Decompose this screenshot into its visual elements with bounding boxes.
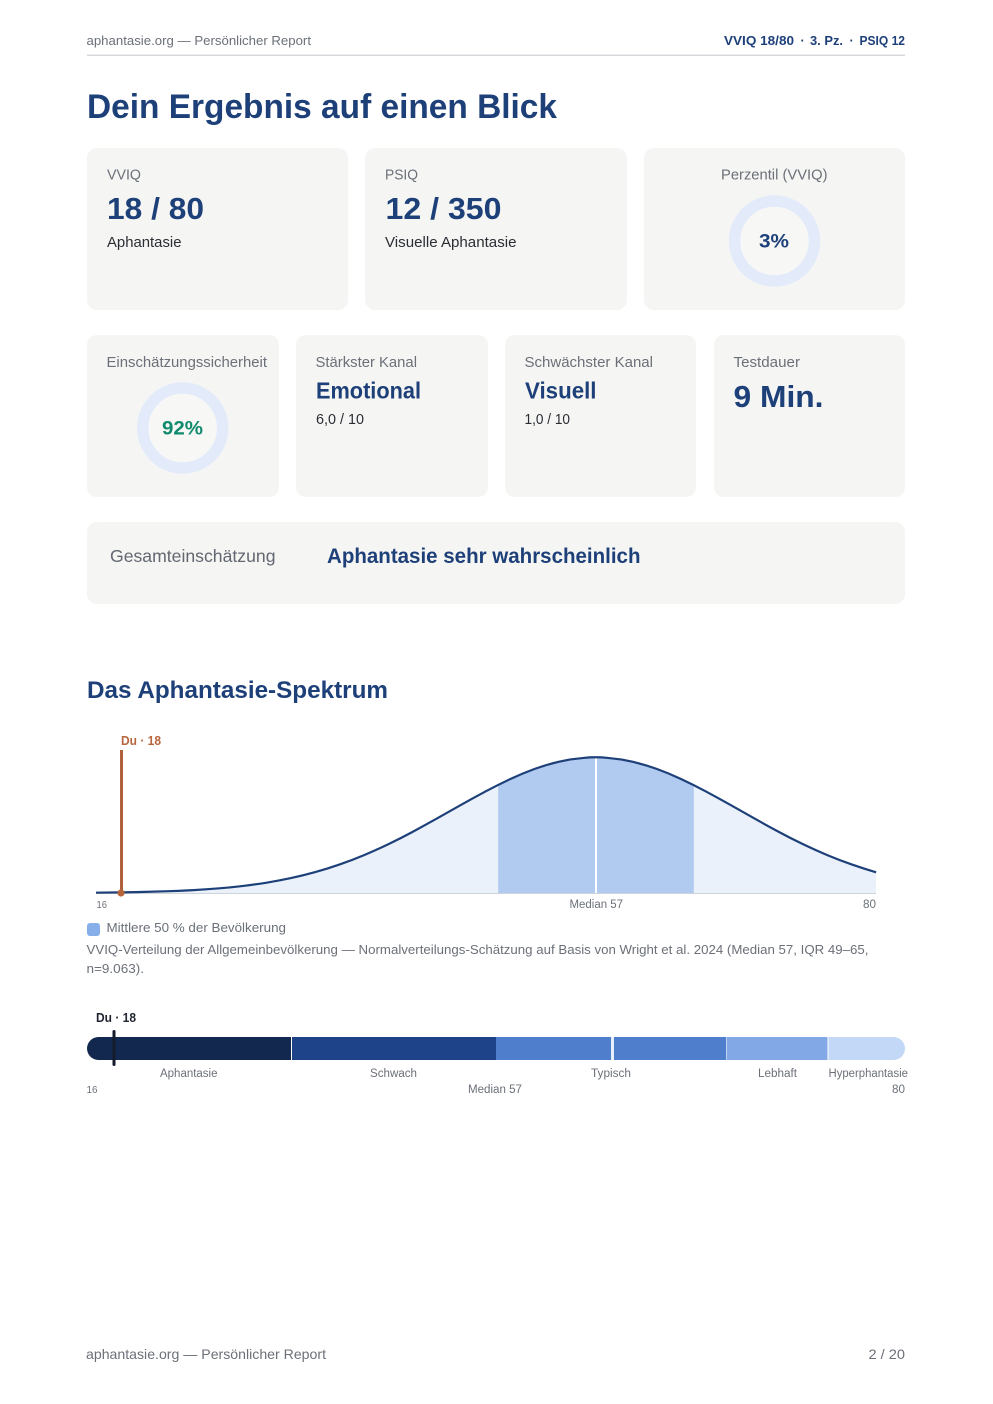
curve line [96,757,876,893]
page header: VVIQ 18/80 [724,34,794,48]
card: VVIQ [87,148,348,310]
median tick [611,1037,614,1060]
card: Stärkster Kanal: Emotional [316,378,421,404]
heading: Spektrum: Das Aphantasie-Spektrum [87,677,388,704]
ring: Perzentil 3%: 3% [759,230,789,252]
axis labels: 16 [96,899,107,911]
chart: distribution curve [96,734,876,911]
card: Stärkster Kanal [296,335,488,497]
ring: Sicherheit 92% [143,388,223,468]
chart note: VVIQ-Verteilung der Allgemeinbevölkerung — Normalverteilungs-Schätzung auf Basis von Wright et al. 2024 (Median 57, IQR 49–65, [86,942,868,957]
card: VVIQ: 18 / 80 [107,191,204,226]
page header: · [800,34,805,48]
marker: Du 18 [96,1011,136,1066]
card: VVIQ: Aphantasie [107,235,182,251]
marker: Du 18: Du · 18 [121,734,161,748]
page header: PSIQ 12 [860,34,905,48]
page footer [86,1346,905,1362]
card: Schwächster Kanal: Schwächster Kanal [524,355,653,371]
card: Stärkster Kanal: Stärkster Kanal [316,355,417,371]
segment: Schwach [292,1037,496,1060]
page header: · [850,34,854,48]
marker: Du 18: Du · 18 [96,1011,136,1025]
chart note [86,942,868,976]
card: PSIQ [365,148,627,310]
interquartile band [498,758,694,893]
ring: Perzentil 3% [734,201,814,281]
card: Perzentil: Perzentil (VVIQ) [721,168,828,184]
card: Stärkster Kanal: 6,0 / 10 [316,412,364,428]
segment: Typisch [496,1037,726,1060]
scale labels [86,1068,908,1096]
card: Gesamteinschätzung [87,522,905,604]
axis labels: 80 [863,899,876,911]
card: Einschätzungssicherheit [87,335,279,497]
scale labels: Aphantasie [160,1068,218,1080]
curve area [96,757,876,893]
card: Testdauer: Testdauer [734,355,800,371]
card: Testdauer [714,335,905,497]
card: Schwächster Kanal: Visuell [525,378,596,404]
scale labels: Median 57 [468,1084,522,1096]
ring: Sicherheit 92%: 92% [162,418,203,440]
card: VVIQ: VVIQ [107,168,141,184]
card: Gesamteinschätzung: Aphantasie sehr wahrscheinlich [327,545,640,568]
median line [595,757,597,893]
scale labels: Schwach [370,1068,417,1080]
page header: aphantasie.org — Persönlicher Report [86,33,311,48]
page footer: 2 / 20 [868,1346,905,1362]
scale labels: 16 [86,1084,98,1096]
card: PSIQ: PSIQ [385,168,418,184]
card: Schwächster Kanal: 1,0 / 10 [524,412,570,428]
segment: Hyperphantasie [828,1037,905,1060]
title: Dein Ergebnis auf einen Blick [87,88,558,126]
segment: Aphantasie [87,1037,291,1060]
card: Perzentil [644,148,905,310]
axis labels: Median 57 [570,899,623,911]
segment: Lebhaft [726,1037,828,1060]
card: Testdauer: 9 Min. [734,379,824,414]
page header: 3. Pz. [810,34,843,48]
scale labels: Lebhaft [758,1068,798,1080]
page footer: aphantasie.org — Persönlicher Report [86,1346,326,1362]
marker: Du 18 [117,734,161,897]
legend: Mittlere 50 % der Bevölkerung [106,920,286,935]
axis baseline [96,893,876,894]
card: Schwächster Kanal [505,335,696,497]
card: PSIQ: Visuelle Aphantasie [385,235,516,251]
card: Einschätzungssicherheit: Einschätzungssicherheit [106,355,267,371]
chart note: n=9.063). [86,961,144,976]
scale labels: 80 [892,1084,905,1096]
card: Gesamteinschätzung: Gesamteinschätzung [110,546,276,566]
card: PSIQ: 12 / 350 [386,191,502,226]
scale labels: Hyperphantasie [828,1068,908,1080]
axis labels [96,899,876,911]
page header [86,33,905,56]
scale labels: Typisch [591,1068,631,1080]
scale bar [87,1011,905,1066]
